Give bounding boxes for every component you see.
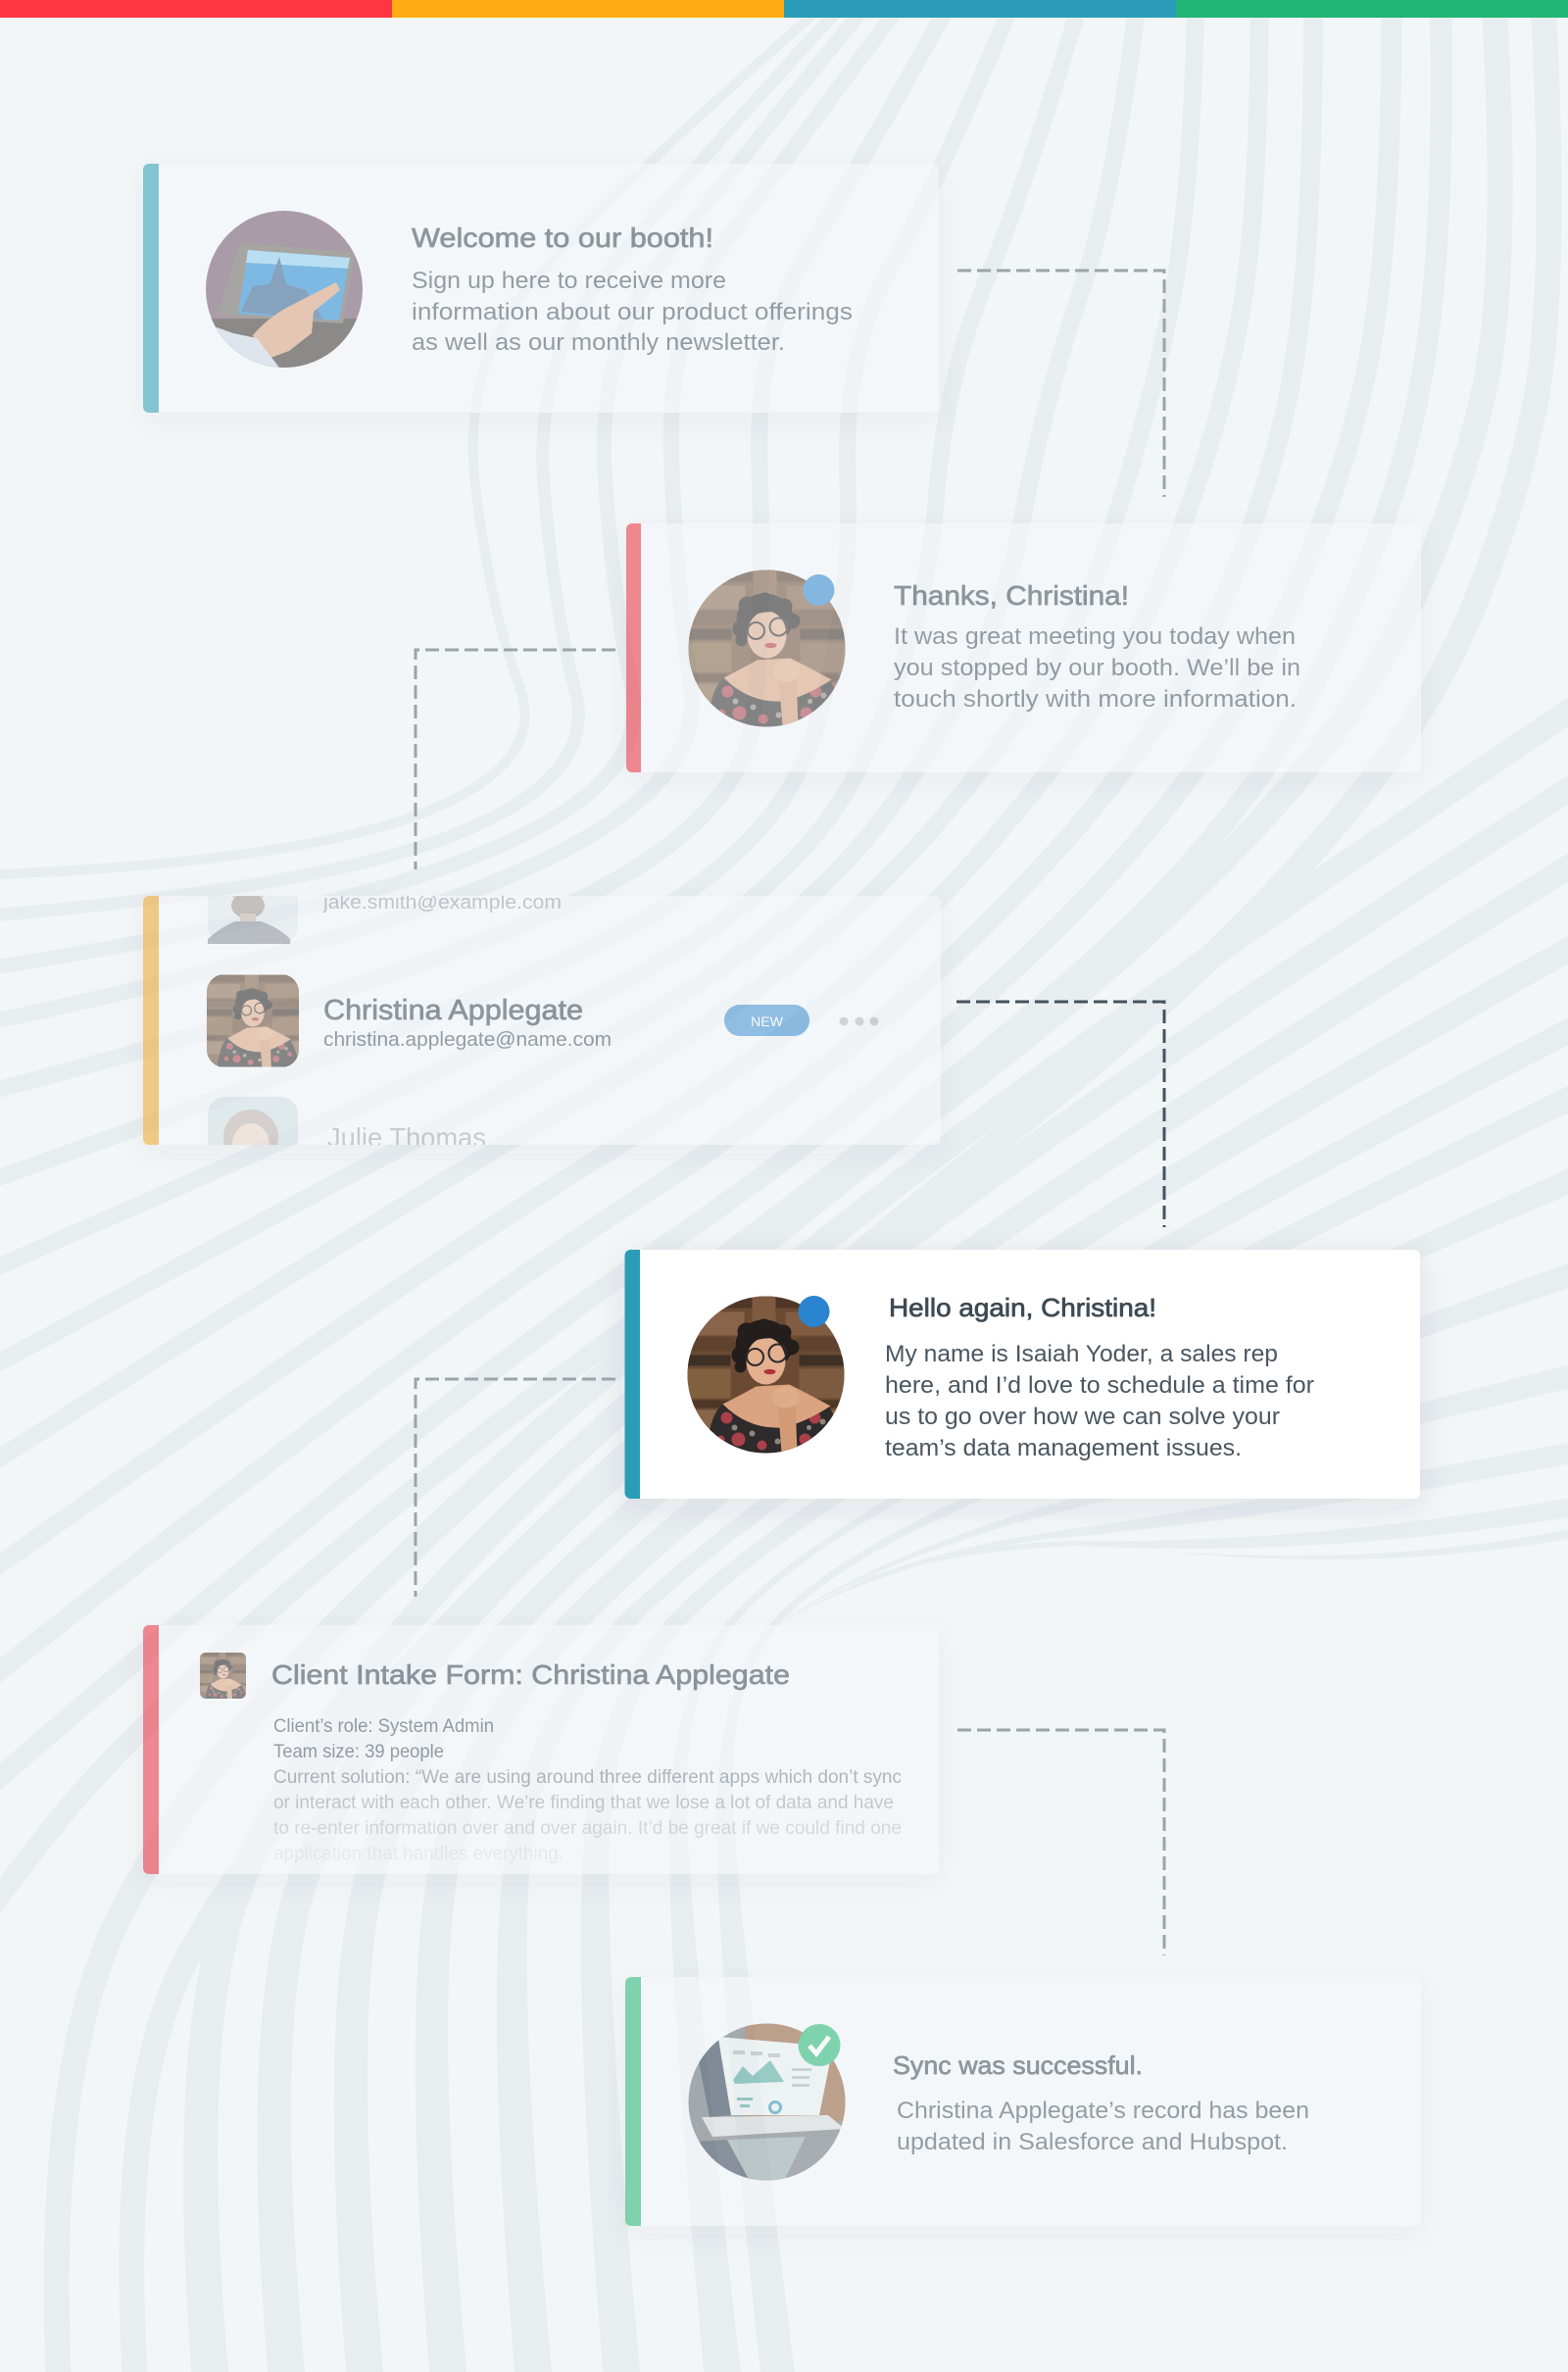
email: christina.applegate@name.com (323, 1028, 612, 1051)
form details (273, 1715, 902, 1864)
body text: Sign up here to receive more (412, 268, 726, 294)
form details: or interact with each other. We’re finding that we lose a lot of data and have (273, 1792, 894, 1813)
body text: Christina Applegate’s record has been (897, 2098, 1309, 2124)
avatar (207, 974, 299, 1066)
form details: Client’s role: System Admin (273, 1715, 494, 1737)
contact row: julie thomas: Julie Thomas (327, 1122, 486, 1153)
heading: Hello again, Christina! (889, 1293, 1156, 1322)
heading: Welcome to our booth! (412, 222, 713, 253)
form details: Team size: 39 people (273, 1741, 444, 1762)
body text (894, 623, 1300, 713)
panel: hello again christina (active) (625, 1250, 1420, 1499)
arrow: connector email to intake form (416, 1379, 615, 1597)
status dot (798, 1296, 829, 1327)
body text: updated in Salesforce and Hubspot. (897, 2129, 1288, 2155)
body text: It was great meeting you today when (894, 623, 1296, 650)
photo: christina (688, 1296, 845, 1453)
heading: Thanks, Christina! (894, 580, 1129, 611)
body text: information about our product offerings (412, 299, 853, 325)
body text: My name is Isaiah Yoder, a sales rep (885, 1341, 1278, 1367)
contact row: jake smith (208, 896, 561, 944)
heading: Sync was successful. (893, 2051, 1143, 2080)
body text: as well as our monthly newsletter. (412, 329, 785, 356)
contact row: christina applegate (207, 974, 878, 1066)
arrow: connector welcome to thanks (957, 271, 1164, 497)
avatar (200, 1653, 246, 1699)
new badge (724, 1005, 809, 1036)
panel: thanks christina (626, 523, 1299, 772)
body text: us to go over how we can solve your (885, 1404, 1280, 1430)
more menu dots (839, 1017, 878, 1025)
body text: here, and I’d love to schedule a time for (885, 1372, 1314, 1399)
body text (885, 1341, 1314, 1461)
arrow: connector intake form to sync (957, 1730, 1164, 1955)
top colour bar (0, 0, 1568, 18)
body text (412, 268, 853, 356)
panel: welcome to our booth (143, 164, 852, 413)
panel: client intake form (143, 1625, 939, 1874)
contact row: jake smith: jake.smith@example.com (322, 891, 562, 914)
heading: Client Intake Form: Christina Applegate (271, 1659, 790, 1690)
form details: to re-enter information over and over again. It’d be great if we could find one (273, 1817, 902, 1839)
form details: application that handles everything. (273, 1843, 564, 1864)
body text (897, 2098, 1309, 2155)
arrow: connector contact list to email, active (956, 1002, 1164, 1227)
check badge (798, 2024, 841, 2066)
new badge: NEW (751, 1013, 784, 1029)
status dot (804, 574, 835, 606)
body text: team’s data management issues. (885, 1435, 1242, 1461)
form details: Current solution: “We are using around three different apps which don’t sync (273, 1766, 902, 1788)
name: Christina Applegate (323, 995, 583, 1026)
panel: sync was successful (625, 1977, 1307, 2226)
photo: hand on tablet (206, 211, 363, 368)
body text: touch shortly with more information. (894, 686, 1297, 713)
body text: you stopped by our booth. We’ll be in (894, 655, 1300, 681)
panel: contact list (143, 896, 878, 1145)
photo: christina (688, 570, 845, 727)
contact row: julie thomas (208, 1097, 485, 1145)
arrow: connector thanks to contact list (416, 650, 615, 869)
photo: laptop dashboard (688, 2023, 846, 2181)
